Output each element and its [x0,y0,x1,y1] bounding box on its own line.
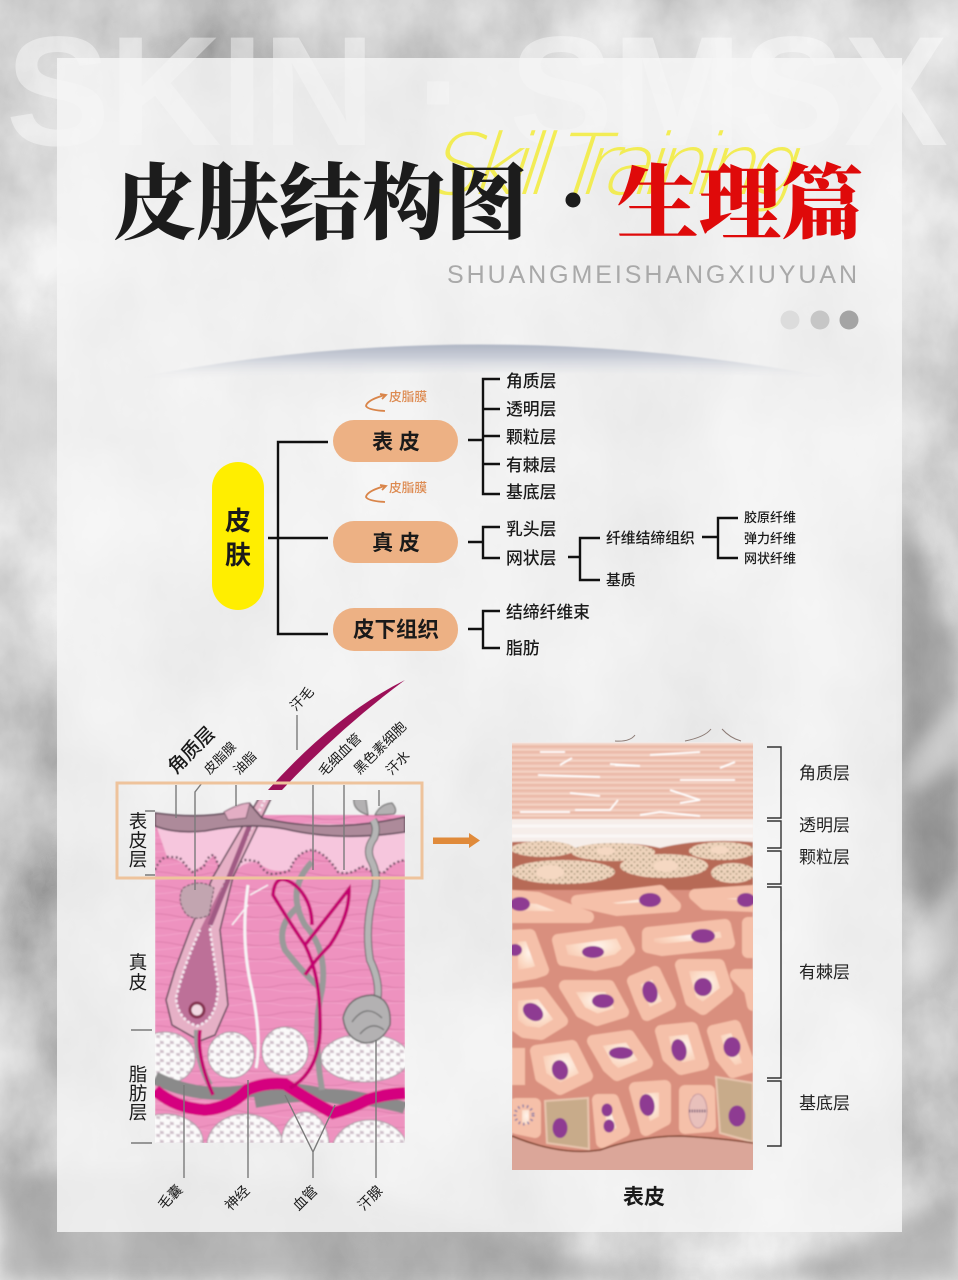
layer labels [799,764,850,1113]
left side labels: 表 [129,811,147,832]
bottom rotated labels: 神经 [221,1182,253,1214]
three dots [780,310,858,330]
bottom rotated labels: 汗腺 [354,1182,386,1214]
watermark text: SKIN · SMSX [6,5,948,179]
node: dermis: 真 皮 [372,532,420,555]
root pill [212,462,264,610]
flowchart [212,372,796,658]
sebum film upper: 皮脂膜 [389,390,427,404]
root pill: 肤 [225,540,251,570]
epidermis layers: 透明层 [506,400,556,419]
left side labels: 皮 [129,830,147,851]
layer labels: 角质层 [799,764,850,783]
caption: epidermis: 表皮 [623,1186,665,1209]
layer labels: 基底层 [799,1094,850,1113]
node: epidermis [333,420,458,462]
white nerve [245,885,258,1068]
fiber labels: 弹力纤维 [744,531,796,546]
sebaceous gland [180,883,214,918]
reticular labels: 基质 [606,572,636,589]
title [113,136,863,256]
swoosh divider [125,344,835,380]
root connector [268,442,328,634]
title dot [566,192,580,208]
subcutis labels: 结缔纤维束 [506,602,590,622]
epidermis layers [506,372,556,502]
bottom rotated labels [154,1181,386,1214]
sweat drops [354,795,368,815]
left side labels: 皮 [129,972,147,993]
base membrane [512,1136,753,1151]
basal cells [516,1104,535,1132]
epidermis branches [468,379,500,494]
epidermis layers: 颗粒层 [506,428,556,447]
title black part: 皮肤结构图 [113,136,528,256]
layer labels: 颗粒层 [799,848,850,867]
epidermis enlarged illustration [505,735,760,1175]
left side labels: 层 [129,849,147,870]
follicle [166,788,276,1041]
subcutis labels: 脂肪 [506,639,540,658]
fiber labels: 网状纤维 [744,551,796,566]
magenta blood vessels [155,1084,405,1113]
node: subcutis [333,608,458,651]
left side labels [129,811,147,1123]
epidermis layers: 有棘层 [506,456,556,475]
layer labels: 透明层 [799,816,850,835]
bottom rotated labels: 血管 [289,1182,321,1214]
hair shaft [268,680,405,790]
bottom rotated labels: 毛囊 [154,1181,186,1213]
dermis base [512,1136,753,1170]
top rotated labels: 汗水 [383,748,413,778]
sebum film upper [366,390,427,411]
highlight frame [117,783,422,878]
sebum film lower: 皮脂膜 [389,481,427,495]
grey nerve trunks [155,1078,360,1099]
epidermis layers: 基底层 [506,483,556,502]
top rotated labels: 角质层 [164,723,220,779]
dermis layers: 网状层 [506,549,556,568]
top rotated labels: 皮脂腺 [201,739,239,777]
title red part: 生理篇 [617,139,863,256]
top rotated labels: 汗毛 [287,684,317,714]
sebum cap [224,803,250,820]
subcutis labels [506,602,590,658]
fat lobules [155,1026,405,1143]
reticular branches [568,538,600,580]
root pill: 皮 [225,506,251,536]
layer brackets [767,747,781,1146]
mitotic cell details [515,1094,707,1128]
stratum corneum surface flakes [615,729,741,741]
left side labels: 肪 [129,1083,147,1104]
layer ticks [131,811,155,1143]
left side labels: 脂 [129,1064,147,1085]
left edge cell [512,1048,525,1085]
dermis layers: 乳头层 [506,520,556,539]
top rotated labels [164,684,413,779]
arrow [433,833,480,848]
epidermis layers: 角质层 [506,372,556,391]
reticular labels: 纤维结缔组织 [606,530,695,547]
node: epidermis: 表 皮 [372,431,420,454]
top rotated labels: 油脂 [230,748,260,778]
leader lines [176,715,379,1178]
stratum lucidum streaks [512,826,753,836]
top rotated labels: 毛细血管 [316,731,364,779]
nuclei [508,893,755,1138]
fiber labels: 胶原纤维 [744,510,796,525]
dermis layers [506,520,556,568]
stratum corneum [512,742,753,820]
fiber labels [744,510,796,566]
fiber branches [702,518,738,558]
layer labels: 有棘层 [799,963,850,982]
left side labels: 层 [129,1102,147,1123]
stratum lucidum [505,819,760,849]
subcutis branches [468,611,500,648]
sweat gland and duct [368,820,378,1005]
top rotated labels: 黑色素细胞 [350,718,410,777]
node: dermis [333,521,458,563]
corneum band [155,804,405,836]
decorative script: Skill Training: Skill Training [417,117,817,214]
tissue layers [155,800,405,1143]
spinous cells [512,891,753,1142]
stratum granulosum [511,841,755,890]
node: subcutis: 皮下组织 [353,618,439,642]
skin cross-section diagram [117,680,422,1214]
sebum film lower [366,481,427,502]
spinous background [512,889,753,1152]
subtitle: SHUANGMEISHANGXIUYUAN [447,261,857,289]
tan melanocytes [545,1077,753,1149]
dermis branches [468,527,500,558]
reticular labels [606,530,695,589]
left side labels: 真 [129,952,147,973]
